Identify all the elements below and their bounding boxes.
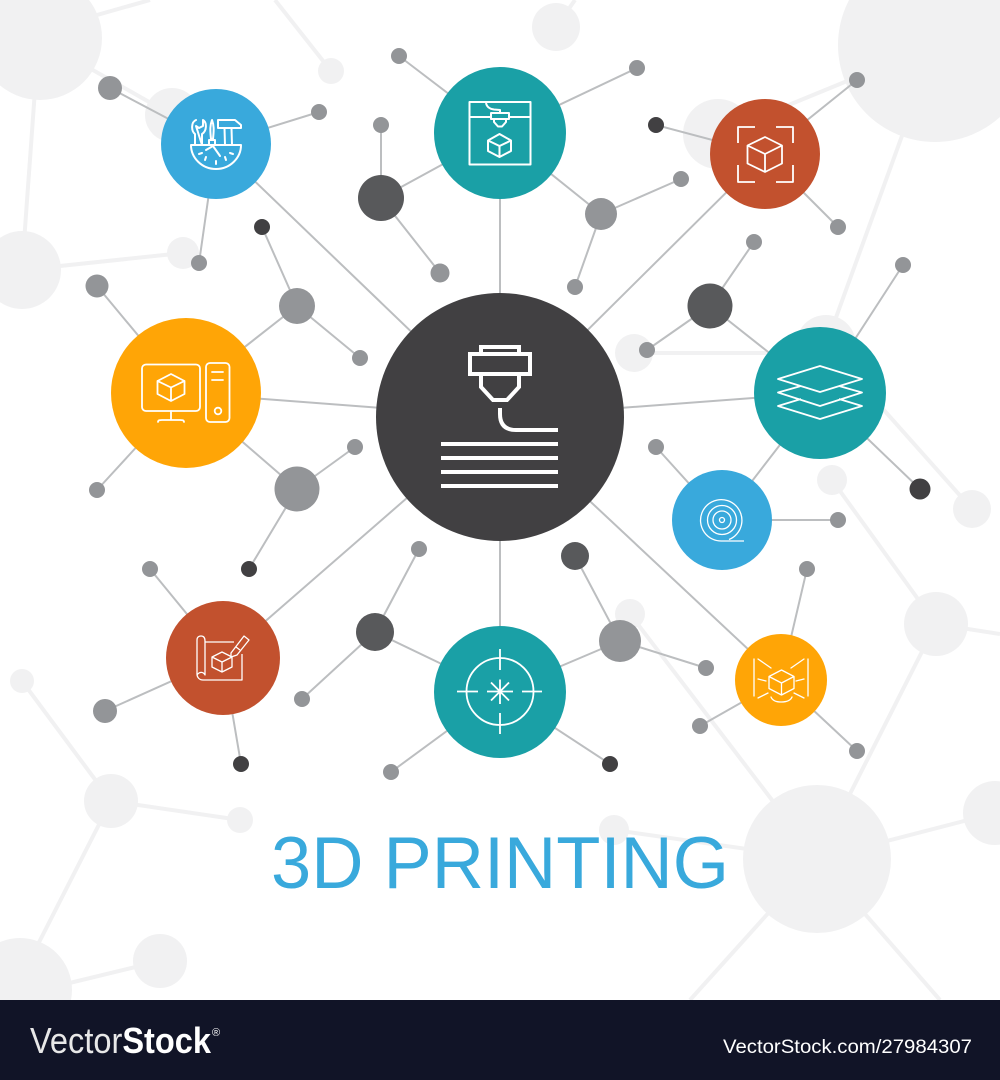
node: layers: [754, 327, 886, 459]
node: tools and gauge: [161, 89, 271, 199]
node: cube in scanner frame: [710, 99, 820, 209]
node: blueprint with pencil: [166, 601, 280, 715]
satellite nodes: [86, 48, 930, 780]
image id: VectorStock.com/27984307: [723, 1036, 972, 1058]
central hub: 3D printer nozzle: [376, 293, 624, 541]
node: 3D printer box: [434, 67, 566, 199]
logo text: VectorStock: [30, 1020, 212, 1061]
footer banner: [0, 1000, 1000, 1080]
registered mark: ®: [212, 1027, 220, 1039]
node: computer with cube: [111, 318, 261, 468]
node: cube with projection rays: [735, 634, 827, 726]
node: filament spool: [672, 470, 772, 570]
title: 3D PRINTING: [271, 823, 729, 904]
node: crosshair target: [434, 626, 566, 758]
